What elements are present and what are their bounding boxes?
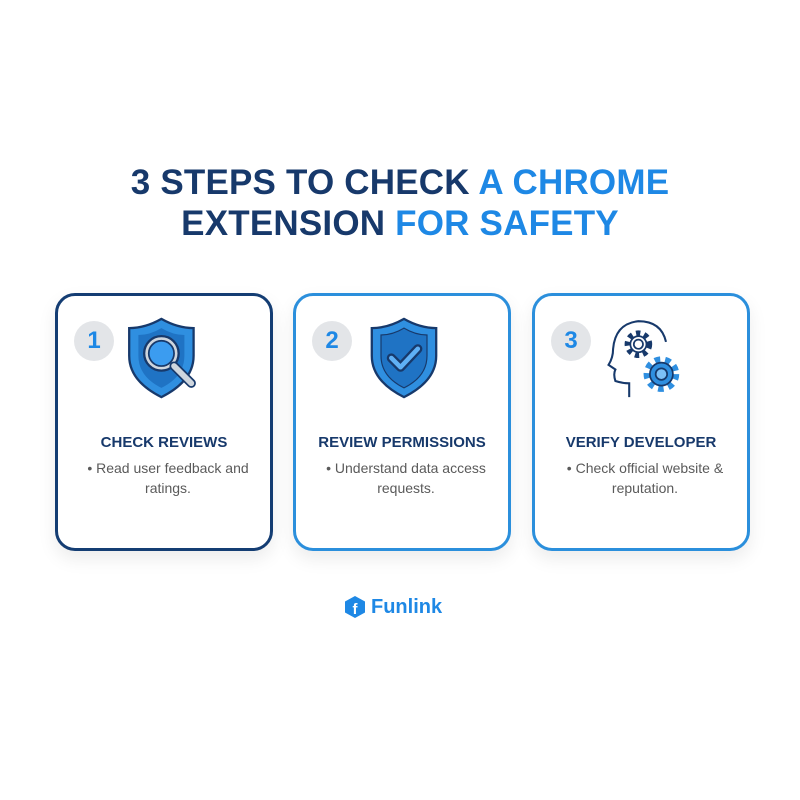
heading: VERIFY DEVELOPER <box>566 434 716 451</box>
panel: verify developer <box>532 293 750 551</box>
number badge 3: 3 <box>564 327 578 354</box>
title <box>131 163 669 243</box>
panel: review permissions <box>293 293 511 551</box>
title: 3 STEPS TO CHECK A CHROME <box>131 163 669 202</box>
icon: shield with check <box>370 318 438 398</box>
title: EXTENSION FOR SAFETY <box>181 204 619 243</box>
text: • Check official website & reputation. <box>567 460 723 496</box>
number badge 2 <box>312 321 352 361</box>
icon: logo hexagon: f <box>352 601 358 618</box>
logo: Funlink: Funlink <box>371 596 442 618</box>
heading: REVIEW PERMISSIONS <box>318 434 486 451</box>
icon: shield with magnifier <box>128 318 196 398</box>
text: • Read user feedback and ratings. <box>87 460 249 496</box>
icon: logo hexagon <box>345 596 365 618</box>
text: • Understand data access requests. <box>326 460 486 496</box>
number badge 2: 2 <box>325 327 339 354</box>
panel: check reviews <box>55 293 273 551</box>
number badge 1 <box>74 321 114 361</box>
number badge 3 <box>551 321 591 361</box>
icon: head with gears <box>607 320 680 398</box>
number badge 1: 1 <box>87 327 101 354</box>
heading: CHECK REVIEWS <box>101 434 227 451</box>
